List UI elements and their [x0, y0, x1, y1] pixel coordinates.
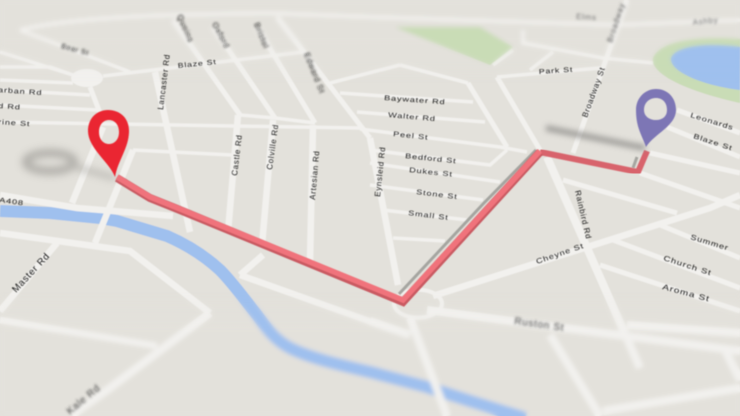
- icon: purple map pin (destination): [636, 89, 676, 147]
- route shadow: [399, 150, 637, 294]
- sharp labels: Leonards: [690, 111, 735, 132]
- blurred far labels: Elms: [576, 12, 597, 22]
- blurred far labels: Ruston St: [514, 316, 565, 334]
- sharp labels: Blaze St: [692, 132, 734, 152]
- blurred far labels: Oxford: [210, 21, 231, 50]
- sharp labels: Eynsleid Rd: [373, 146, 387, 197]
- sharp labels: Walter Rd: [388, 111, 436, 123]
- sharp labels: Cheyne St: [535, 242, 585, 266]
- blurred far labels: Broadway: [605, 2, 627, 44]
- sharp labels: Blaze St: [177, 58, 217, 70]
- sharp labels: Aroma St: [662, 282, 711, 303]
- sharp labels: Artesian Rd: [308, 150, 321, 200]
- sharp labels: Castle Rd: [230, 134, 244, 176]
- sharp labels: Small St: [408, 209, 449, 222]
- sharp labels: Stone St: [416, 188, 458, 201]
- sharp labels: Broadway St: [580, 66, 607, 119]
- icon: red map pin (start): [88, 110, 129, 177]
- blurred far labels: Bristol: [252, 21, 271, 50]
- sharp labels: Bedford St: [405, 152, 457, 165]
- route: near section: [117, 151, 540, 302]
- sharp labels: Dukes St: [409, 166, 453, 178]
- sharp labels: Summer: [689, 233, 730, 252]
- shadow: red pin: [26, 153, 115, 178]
- sharp labels: Master Rd: [10, 251, 52, 295]
- sharp labels: Colville Rd: [265, 124, 280, 170]
- blurred far labels: Edward St: [302, 51, 327, 95]
- sharp labels: Park St: [539, 66, 573, 76]
- blurred far labels: Ashby: [692, 15, 719, 27]
- blurred far labels: Quoins: [175, 13, 195, 44]
- route line: [117, 151, 647, 302]
- sharp labels: Peel St: [393, 130, 429, 141]
- sharp labels: Church St: [662, 254, 713, 277]
- shadow: purple pin: [546, 128, 645, 148]
- sharp labels: [0, 54, 735, 303]
- route: far section: [540, 151, 647, 172]
- sharp labels: Lancaster Rd: [156, 54, 172, 110]
- sharp labels: Baywater Rd: [384, 94, 446, 106]
- blurred far labels: Bear St: [60, 43, 90, 57]
- sharp labels: Rainbird Rd: [573, 189, 593, 240]
